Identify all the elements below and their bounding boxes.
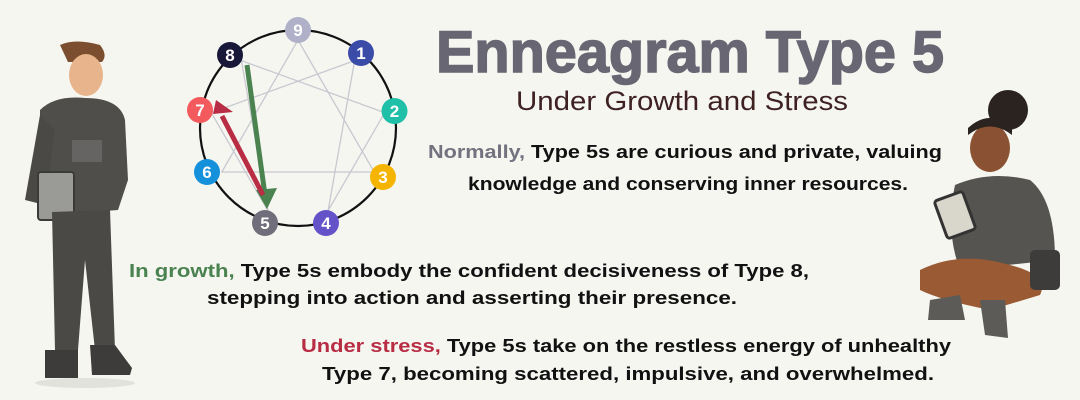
subtitle: Under Growth and Stress	[516, 86, 848, 116]
nodes: 8	[225, 46, 235, 65]
text: stress	[301, 336, 951, 384]
nodes: 9	[293, 21, 303, 40]
nodes	[187, 17, 408, 236]
nodes: 2	[390, 102, 399, 121]
nodes: 7	[195, 101, 205, 120]
nodes: 5	[260, 214, 270, 233]
text: growth: In growth, Type 5s embody the confident decisiveness of Type 8,	[129, 261, 809, 281]
inner lines	[211, 40, 385, 211]
nodes: 4	[321, 214, 331, 233]
arrow: stress 5 to 7	[213, 100, 263, 195]
text: normally: Normally, Type 5s are curious and private, valuing	[428, 142, 942, 162]
nodes: 1	[356, 44, 366, 63]
text: normally	[428, 142, 942, 194]
title: Enneagram Type 5	[436, 20, 944, 85]
text: normally: knowledge and conserving inner resources.	[468, 174, 908, 194]
figure: standing man	[25, 42, 135, 388]
text: growth	[129, 261, 809, 308]
text: stress: Under stress, Type 5s take on the restless energy of unhealthy	[301, 336, 951, 356]
text: growth: stepping into action and asserting their presence.	[207, 288, 737, 308]
nodes: 6	[202, 163, 212, 182]
figure: sitting woman	[920, 90, 1060, 338]
text: stress: Type 7, becoming scattered, impulsive, and overwhelmed.	[322, 364, 934, 384]
nodes: 3	[378, 168, 388, 187]
arrow: growth 5 to 8	[247, 65, 277, 209]
enneagram diagram	[187, 17, 408, 236]
